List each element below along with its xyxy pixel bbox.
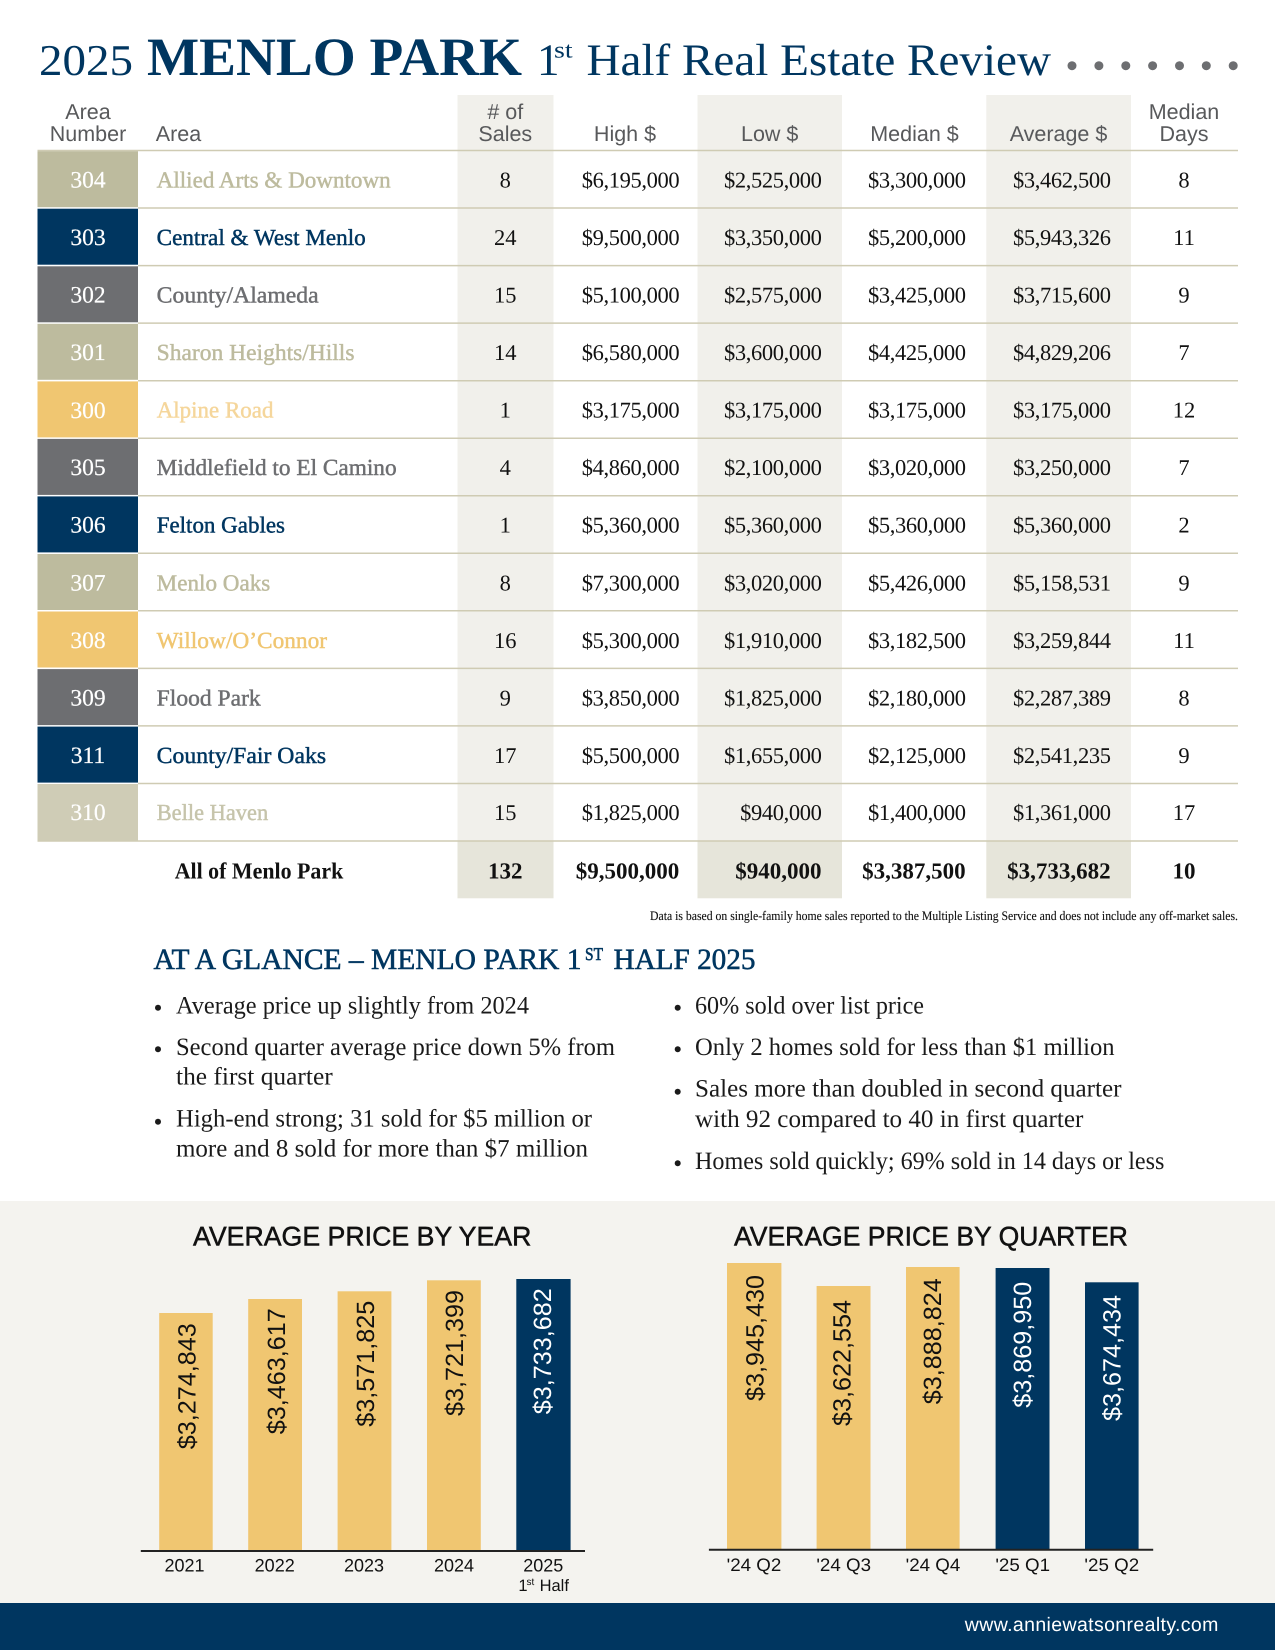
at a glance right bullets: Homes sold quickly; 69% sold in 14 days or less <box>695 1148 1164 1175</box>
row 309: $1,825,000 <box>724 685 822 710</box>
row 302: $3,425,000 <box>868 283 966 308</box>
row 305: $3,020,000 <box>868 455 966 480</box>
row 311: 17 <box>494 743 517 768</box>
bar chart: average price by year: 2021 <box>164 1556 205 1576</box>
row 306: $5,360,000 <box>724 513 822 538</box>
row 307: 8 <box>500 570 511 595</box>
row 300: $3,175,000 <box>724 398 822 423</box>
row 302: 302 <box>70 283 106 309</box>
bar chart: average price by year: $3,463,617 <box>263 1308 291 1434</box>
row 307: $7,300,000 <box>582 570 679 595</box>
table header: # of <box>487 100 523 124</box>
row 310 <box>38 784 1195 840</box>
title: MENLO PARK <box>147 27 522 87</box>
row 309: 8 <box>1178 685 1190 710</box>
row 306: $5,360,000 <box>1013 513 1111 538</box>
row 301: 14 <box>494 340 517 365</box>
row 309: $2,287,389 <box>1013 685 1111 710</box>
bar chart: average price by year: $3,274,843 <box>174 1323 202 1449</box>
row 300: $3,175,000 <box>1013 398 1111 423</box>
table header: Number <box>50 122 126 146</box>
table header: Low $ <box>741 122 798 146</box>
row 310: 310 <box>70 800 106 826</box>
bar chart: average price by quarter: '24 Q3 <box>816 1555 871 1575</box>
row 308: $3,182,500 <box>868 628 966 653</box>
bar chart: average price by quarter: '24 Q2 <box>727 1555 781 1575</box>
table header: Median <box>1149 100 1219 124</box>
row 304: $6,195,000 <box>582 168 679 193</box>
row 307: $3,020,000 <box>724 570 822 595</box>
row 305: 7 <box>1178 455 1190 480</box>
row 306: $5,360,000 <box>868 513 966 538</box>
at a glance left bullets: the first quarter <box>176 1063 333 1090</box>
bar chart: average price by quarter: $3,674,434 <box>1098 1295 1126 1421</box>
heading: average price by year: AVERAGE PRICE BY YEAR <box>193 1222 531 1252</box>
bar chart: average price by year: 2022 <box>255 1556 295 1576</box>
row 302 <box>38 266 1190 322</box>
row 304: $3,462,500 <box>1013 168 1111 193</box>
row 306 <box>38 496 1190 552</box>
row 309: 9 <box>500 685 511 710</box>
row 305: Middlefield to El Camino <box>157 455 397 480</box>
row 301: 7 <box>1178 340 1190 365</box>
row 309: $2,180,000 <box>868 685 966 710</box>
row 300 <box>38 381 1195 437</box>
bar chart: average price by quarter: $3,869,950 <box>1009 1282 1037 1408</box>
row 311: County/Fair Oaks <box>157 743 326 768</box>
at a glance left bullets: more and 8 sold for more than $7 million <box>176 1136 588 1163</box>
at a glance left bullets: High-end strong; 31 sold for $5 million or <box>176 1106 593 1133</box>
table header: Median $ <box>870 122 959 146</box>
bar chart: average price by quarter <box>709 1263 1153 1575</box>
row 302: County/Alameda <box>157 283 319 308</box>
row 305: $3,250,000 <box>1013 455 1111 480</box>
total row: all of Menlo Park: 10 <box>1172 858 1196 883</box>
bar chart: average price by year: Half <box>540 1577 569 1595</box>
row 301: $3,600,000 <box>724 340 822 365</box>
row 311 <box>38 727 1190 783</box>
row 301: Sharon Heights/Hills <box>157 340 355 365</box>
row 311: 311 <box>71 743 105 769</box>
row 311: $5,500,000 <box>582 743 679 768</box>
row 300: 300 <box>70 398 106 424</box>
chart panel background <box>0 1201 1275 1603</box>
row 302: $3,715,600 <box>1013 283 1111 308</box>
row 306: Felton Gables <box>157 513 285 538</box>
title <box>39 27 1052 87</box>
table header: Sales <box>478 122 532 146</box>
bar chart: average price by year: $3,571,825 <box>352 1301 380 1427</box>
row 310: 17 <box>1173 800 1195 825</box>
bar chart: average price by year: 2025 <box>523 1556 563 1576</box>
heading: average price by quarter: AVERAGE PRICE BY QUARTER <box>734 1222 1128 1252</box>
title: st <box>554 38 573 63</box>
total row: all of Menlo Park: 132 <box>488 858 523 883</box>
row 310: $1,361,000 <box>1013 800 1111 825</box>
at a glance right bullets: Sales more than doubled in second quarter <box>695 1076 1122 1103</box>
bar chart: average price by quarter: $3,945,430 <box>742 1275 770 1401</box>
bar chart: average price by year: 2023 <box>344 1556 384 1576</box>
row 300: Alpine Road <box>157 398 274 423</box>
row 300: $3,175,000 <box>582 398 679 423</box>
row 304: 304 <box>70 168 106 194</box>
table row rules <box>38 150 1238 841</box>
row 301: $4,425,000 <box>868 340 966 365</box>
row 305: $4,860,000 <box>582 455 679 480</box>
row 307: 307 <box>70 570 106 596</box>
row 304: $3,300,000 <box>868 168 966 193</box>
at a glance heading: AT A GLANCE – MENLO PARK 1 <box>154 944 582 976</box>
row 302: $2,575,000 <box>724 283 822 308</box>
row 302: $5,100,000 <box>582 283 679 308</box>
row 311: $1,655,000 <box>724 743 822 768</box>
row 308: Willow/O’Connor <box>157 628 327 653</box>
row 309: $3,850,000 <box>582 685 679 710</box>
decorative dot row <box>1068 61 1238 70</box>
row 303: $5,943,326 <box>1013 225 1111 250</box>
row 305: 305 <box>70 455 106 481</box>
bar chart: average price by year: 2024 <box>434 1556 474 1576</box>
at a glance left bullets <box>155 992 616 1163</box>
at a glance right bullets: Only 2 homes sold for less than $1 million <box>695 1034 1115 1061</box>
footer bar with website: www.anniewatsonrealty.com <box>964 1614 1218 1636</box>
total row: all of Menlo Park: All of Menlo Park <box>175 858 343 883</box>
row 308: $5,300,000 <box>582 628 679 653</box>
row 303: $3,350,000 <box>724 225 822 250</box>
table shaded columns <box>458 95 1131 898</box>
row 304: Allied Arts & Downtown <box>157 168 391 193</box>
table header: High $ <box>594 122 656 146</box>
total row: all of Menlo Park: $3,733,682 <box>1007 858 1111 883</box>
table header: Area <box>65 100 111 124</box>
row 306: 2 <box>1178 513 1190 538</box>
row 304: 8 <box>500 168 511 193</box>
row 304: $2,525,000 <box>724 168 822 193</box>
row 303: $9,500,000 <box>582 225 679 250</box>
table header: Days <box>1160 122 1208 146</box>
row 307 <box>38 554 1190 610</box>
row 303: 303 <box>70 225 106 251</box>
row 303: 24 <box>494 225 517 250</box>
at a glance heading: ST <box>585 944 603 964</box>
row 308: 16 <box>494 628 517 653</box>
row 304 <box>38 151 1190 207</box>
row 303: $5,200,000 <box>868 225 966 250</box>
bar chart: average price by quarter: $3,888,824 <box>919 1278 947 1404</box>
row 300: 12 <box>1173 398 1195 423</box>
bar chart: average price by quarter: $3,622,554 <box>829 1300 857 1426</box>
row 307: Menlo Oaks <box>157 570 270 595</box>
row 305: $2,100,000 <box>724 455 822 480</box>
bar chart: average price by quarter: '25 Q1 <box>995 1555 1050 1575</box>
row 308: $1,910,000 <box>724 628 822 653</box>
at a glance left bullets: Average price up slightly from 2024 <box>176 992 529 1019</box>
total row: all of Menlo Park: $3,387,500 <box>862 858 966 883</box>
row 300: 1 <box>500 398 511 423</box>
title: 2025 <box>39 36 133 85</box>
row 310: Belle Haven <box>157 800 269 825</box>
row 310: 15 <box>494 800 517 825</box>
at a glance left bullets: Second quarter average price down 5% from <box>176 1034 616 1061</box>
row 301: $6,580,000 <box>582 340 679 365</box>
row 308: 308 <box>70 628 106 654</box>
row 306: 306 <box>70 513 106 539</box>
row 306: $5,360,000 <box>582 513 679 538</box>
row 308 <box>38 612 1195 668</box>
row 310: $940,000 <box>740 800 822 825</box>
row 303: Central & West Menlo <box>157 225 366 250</box>
row 302: 9 <box>1178 283 1190 308</box>
row 311: 9 <box>1178 743 1190 768</box>
table header <box>50 100 1219 146</box>
bar chart: average price by year: st <box>526 1577 534 1588</box>
row 309: 309 <box>70 685 106 711</box>
row 307: $5,158,531 <box>1013 570 1111 595</box>
row 308: $3,259,844 <box>1013 628 1111 653</box>
total row: all of Menlo Park: $9,500,000 <box>576 858 679 883</box>
row 310: $1,400,000 <box>868 800 966 825</box>
total row: all of Menlo Park: $940,000 <box>735 858 822 883</box>
row 311: $2,125,000 <box>868 743 966 768</box>
bar chart: average price by quarter: '24 Q4 <box>906 1555 960 1575</box>
row 306: 1 <box>500 513 511 538</box>
row 309 <box>38 669 1190 725</box>
row 302: 15 <box>494 283 517 308</box>
bar chart: average price by year: $3,721,399 <box>441 1290 469 1416</box>
row 305: 4 <box>500 455 511 480</box>
row 301: 301 <box>70 340 106 366</box>
table header: Area <box>156 122 201 146</box>
at a glance right bullets: 60% sold over list price <box>695 992 924 1019</box>
at a glance right bullets: with 92 compared to 40 in first quarter <box>695 1106 1084 1133</box>
title: Half Real Estate Review <box>586 35 1052 85</box>
row 305 <box>38 439 1190 495</box>
row 303: 11 <box>1173 225 1195 250</box>
bar chart: average price by year: 1 <box>518 1577 528 1595</box>
row 301 <box>38 324 1190 380</box>
row 300: $3,175,000 <box>868 398 966 423</box>
row 310: $1,825,000 <box>582 800 679 825</box>
row 308: 11 <box>1173 628 1195 653</box>
row 311: $2,541,235 <box>1013 743 1111 768</box>
row 309: Flood Park <box>157 685 261 710</box>
bar chart: average price by quarter: '25 Q2 <box>1084 1555 1139 1575</box>
title: 1 <box>537 35 560 85</box>
row 303 <box>38 209 1195 265</box>
footer bar with website <box>0 1603 1275 1650</box>
table header: Average $ <box>1010 122 1107 146</box>
row 301: $4,829,206 <box>1013 340 1111 365</box>
total row: all of Menlo Park <box>175 858 1195 883</box>
row 307: $5,426,000 <box>868 570 966 595</box>
bar chart: average price by year <box>141 1279 585 1595</box>
bar chart: average price by year: $3,733,682 <box>529 1288 557 1414</box>
at a glance right bullets <box>675 992 1164 1175</box>
at a glance heading: HALF 2025 <box>614 944 756 976</box>
row 304: 8 <box>1178 168 1190 193</box>
row 307: 9 <box>1178 570 1190 595</box>
